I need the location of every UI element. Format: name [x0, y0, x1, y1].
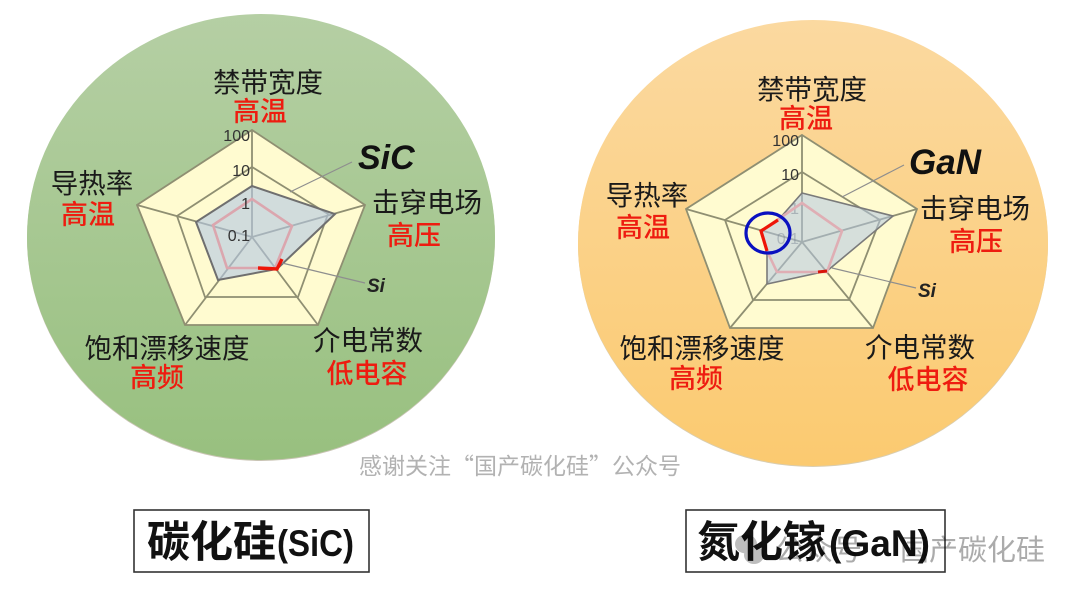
Si chart label: Si — [918, 281, 937, 302]
axis label: saturation drift velocity — [84, 333, 250, 393]
axis label: bandgap — [213, 67, 323, 127]
watermark text: 国产碳化硅 — [900, 534, 1045, 567]
GaN radar chart: 10 — [781, 167, 799, 184]
axis label: thermal conductivity: 导热率 — [606, 180, 688, 211]
axis label: bandgap: 高温 — [233, 97, 287, 127]
axis label: saturation drift velocity: 饱和漂移速度 — [620, 333, 784, 364]
axis label: saturation drift velocity: 饱和漂移速度 — [84, 333, 250, 364]
Si chart label: Si — [367, 276, 386, 297]
SiC radar chart: 1 — [241, 196, 250, 213]
axis label: thermal conductivity — [606, 180, 688, 243]
watermark text: 公众号 — [775, 535, 862, 567]
title box: GaN: 氮化镓 — [697, 519, 826, 567]
axis label: dielectric constant: 介电常数 — [865, 332, 975, 363]
title box: GaN — [686, 510, 945, 572]
axis label: thermal conductivity — [51, 168, 133, 230]
axis label: saturation drift velocity — [620, 333, 784, 394]
axis label: thermal conductivity: 高温 — [61, 200, 115, 230]
GaN radar chart: 1 — [790, 201, 799, 218]
SiC chart label: SiC — [358, 139, 415, 177]
axis label: dielectric constant: 低电容 — [888, 365, 968, 395]
SiC radar chart — [137, 128, 365, 325]
axis label: bandgap: 禁带宽度 — [213, 67, 323, 98]
GaN radar chart: 0.1 — [777, 231, 799, 248]
title box: SiC — [134, 510, 369, 572]
GaN chart label: GaN — [909, 143, 982, 182]
axis label: thermal conductivity: 高温 — [616, 213, 670, 243]
GaN radar chart — [686, 133, 917, 328]
axis label: bandgap: 高温 — [779, 104, 833, 134]
axis label: breakdown field: 高压 — [387, 221, 441, 251]
axis label: breakdown field — [920, 193, 1030, 257]
axis label: dielectric constant: 低电容 — [326, 359, 408, 389]
axis label: saturation drift velocity: 高频 — [669, 364, 723, 394]
axis label: dielectric constant — [313, 325, 423, 389]
SiC radar chart: 0.1 — [228, 228, 250, 245]
axis label: breakdown field — [372, 187, 482, 251]
title box: SiC: (SiC) — [277, 523, 354, 564]
SiC radar chart: 10 — [232, 163, 250, 180]
axis label: saturation drift velocity: 高频 — [130, 363, 184, 393]
axis label: bandgap — [757, 74, 867, 134]
panel: SiC radar circle — [27, 14, 495, 461]
SiC radar chart: 100 — [223, 128, 250, 145]
GaN radar chart: 100 — [772, 133, 799, 150]
title box: GaN: (GaN) — [829, 523, 930, 564]
axis label: breakdown field: 击穿电场 — [920, 193, 1030, 224]
axis label: dielectric constant — [865, 332, 975, 395]
caption: follow message: 感谢关注“国产碳化硅”公众号 — [359, 447, 681, 481]
axis label: dielectric constant: 介电常数 — [313, 325, 423, 356]
watermark: WeChat icon — [735, 534, 764, 564]
axis label: bandgap: 禁带宽度 — [757, 74, 867, 105]
callout: blue circle — [746, 213, 790, 253]
axis label: breakdown field: 高压 — [949, 227, 1003, 257]
title box: SiC: 碳化硅 — [147, 519, 276, 567]
axis label: thermal conductivity: 导热率 — [51, 168, 133, 199]
axis label: breakdown field: 击穿电场 — [372, 187, 482, 218]
panel: GaN radar circle — [578, 20, 1048, 467]
